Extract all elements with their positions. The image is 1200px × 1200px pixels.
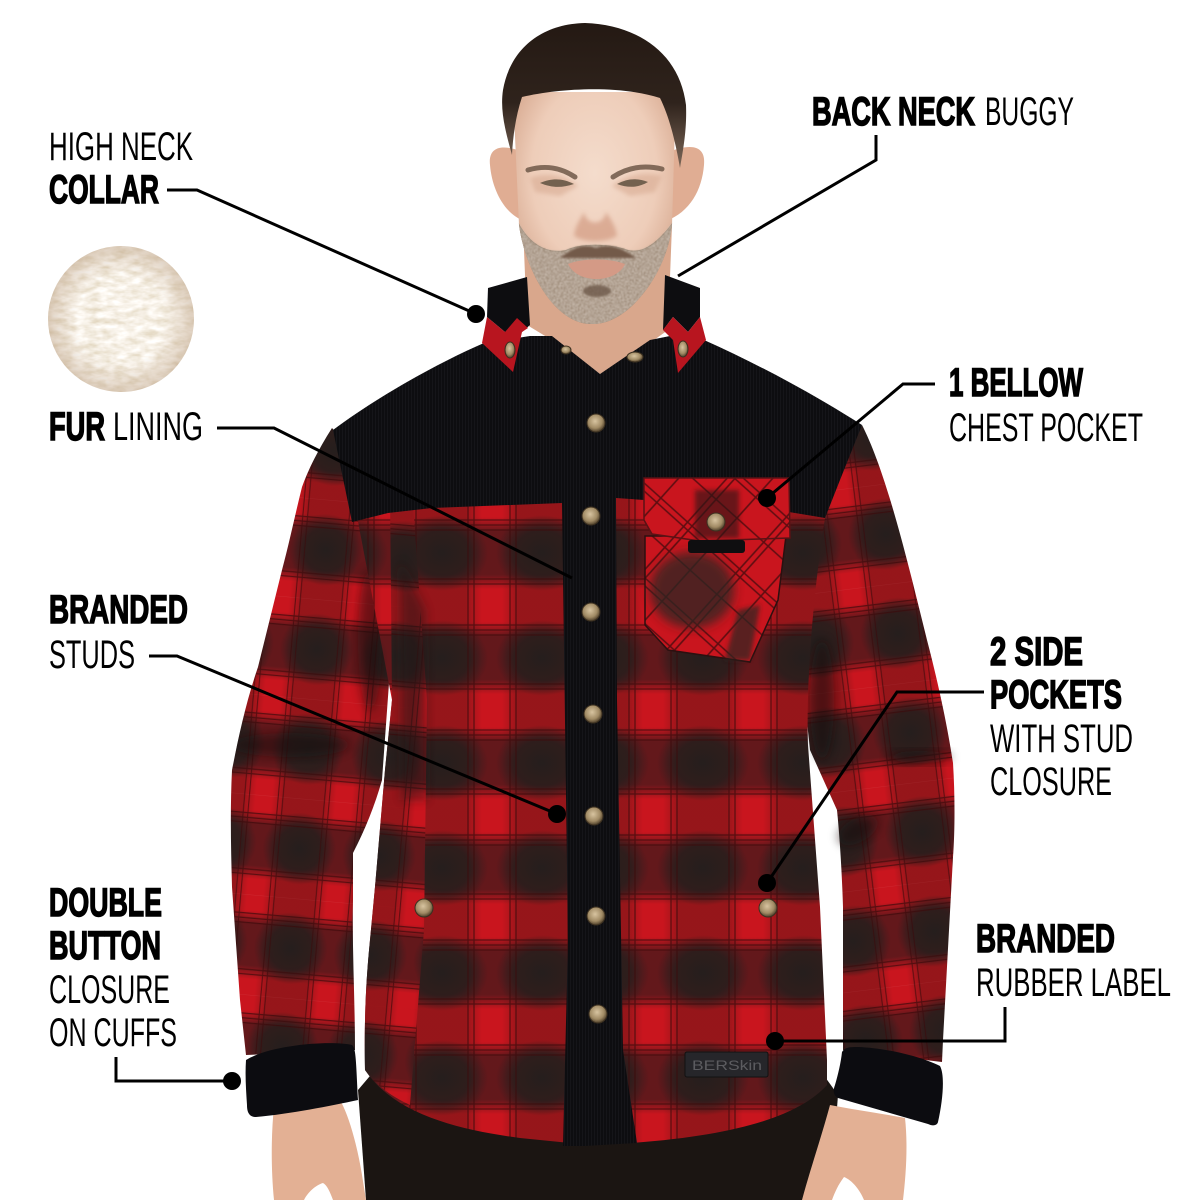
beard: [518, 223, 672, 324]
label: double button closure: [49, 881, 241, 1090]
pocket tab: [688, 540, 745, 553]
label: branded rubber label: BRANDED: [976, 917, 1115, 961]
pocket flap: [644, 478, 790, 541]
corduroy yoke: [333, 336, 862, 522]
left side panel: [365, 490, 427, 1105]
right collar tab: [663, 317, 706, 373]
right hand: [802, 1105, 906, 1200]
label: 2 side pockets: 2 SIDE: [990, 630, 1083, 674]
jacket right sleeve: [790, 425, 954, 1062]
lips: [568, 260, 625, 279]
eyes: [540, 179, 648, 187]
label: back neck buggy: BACK NECK: [812, 90, 975, 134]
label: fur lining: [49, 405, 572, 578]
right ear: [666, 147, 704, 221]
left hand: [272, 1102, 366, 1200]
chest pocket: [645, 536, 786, 662]
pocket flap darker centre: [695, 490, 739, 538]
label: branded rubber label: [766, 917, 1171, 1050]
pocket dark patch: [650, 552, 734, 628]
label: double button closure: BUTTON: [49, 924, 161, 968]
right cuff: [834, 1047, 943, 1125]
label: back neck buggy: [678, 90, 1074, 276]
label: 1 bellow chest pocket: [758, 361, 1143, 507]
label: 2 side pockets: POCKETS: [990, 673, 1122, 717]
moustache: [560, 246, 636, 258]
fur lining swatch: [48, 246, 194, 392]
right sleeve fold shadows: [810, 640, 952, 851]
hair: [502, 23, 686, 168]
label: branded studs: [49, 588, 566, 823]
label: double button closure: DOUBLE: [49, 881, 162, 925]
model wearing jacket: [230, 23, 954, 1200]
jacket body left panel: [352, 490, 570, 1143]
label: branded studs: BRANDED: [49, 588, 188, 632]
left side panel shadow: [400, 560, 427, 800]
label: high neck collar: [49, 125, 485, 323]
label: double button closure: ON CUFFS: [49, 1011, 177, 1055]
label: branded studs: STUDS: [49, 633, 135, 677]
pocket lower shadow: [725, 605, 760, 660]
placket: [562, 374, 637, 1146]
studs: [415, 341, 777, 1023]
label: back neck buggy: BUGGY: [985, 90, 1074, 134]
face: [513, 92, 676, 324]
nose: [574, 212, 617, 241]
label: 2 side pockets: [758, 630, 1133, 892]
left sleeve fold shadows: [230, 570, 382, 757]
jacket left sleeve: [231, 428, 395, 1055]
eye sockets: [530, 174, 662, 196]
label: 2 side pockets: CLOSURE: [990, 760, 1112, 804]
collar right: [663, 275, 700, 332]
label: high neck collar: HIGH NECK: [49, 125, 193, 169]
left ear: [490, 147, 525, 221]
left collar tab: [482, 317, 528, 372]
neck: [523, 225, 672, 374]
jacket body right panel: [610, 480, 827, 1143]
label: high neck collar: COLLAR: [49, 168, 159, 212]
label: 1 bellow chest pocket: 1 BELLOW: [949, 361, 1083, 405]
label: fur lining: FUR: [49, 405, 105, 449]
label: fur lining: LINING: [113, 405, 203, 449]
trousers: [358, 1070, 838, 1200]
under lip shadow: [583, 285, 611, 297]
left cuff: [246, 1043, 358, 1117]
collar left: [487, 277, 530, 332]
eyebrows: [528, 167, 662, 177]
label: double button closure: CLOSURE: [49, 968, 170, 1012]
rubber label: [685, 1052, 768, 1077]
rubber label: BERSkin: [692, 1057, 762, 1073]
